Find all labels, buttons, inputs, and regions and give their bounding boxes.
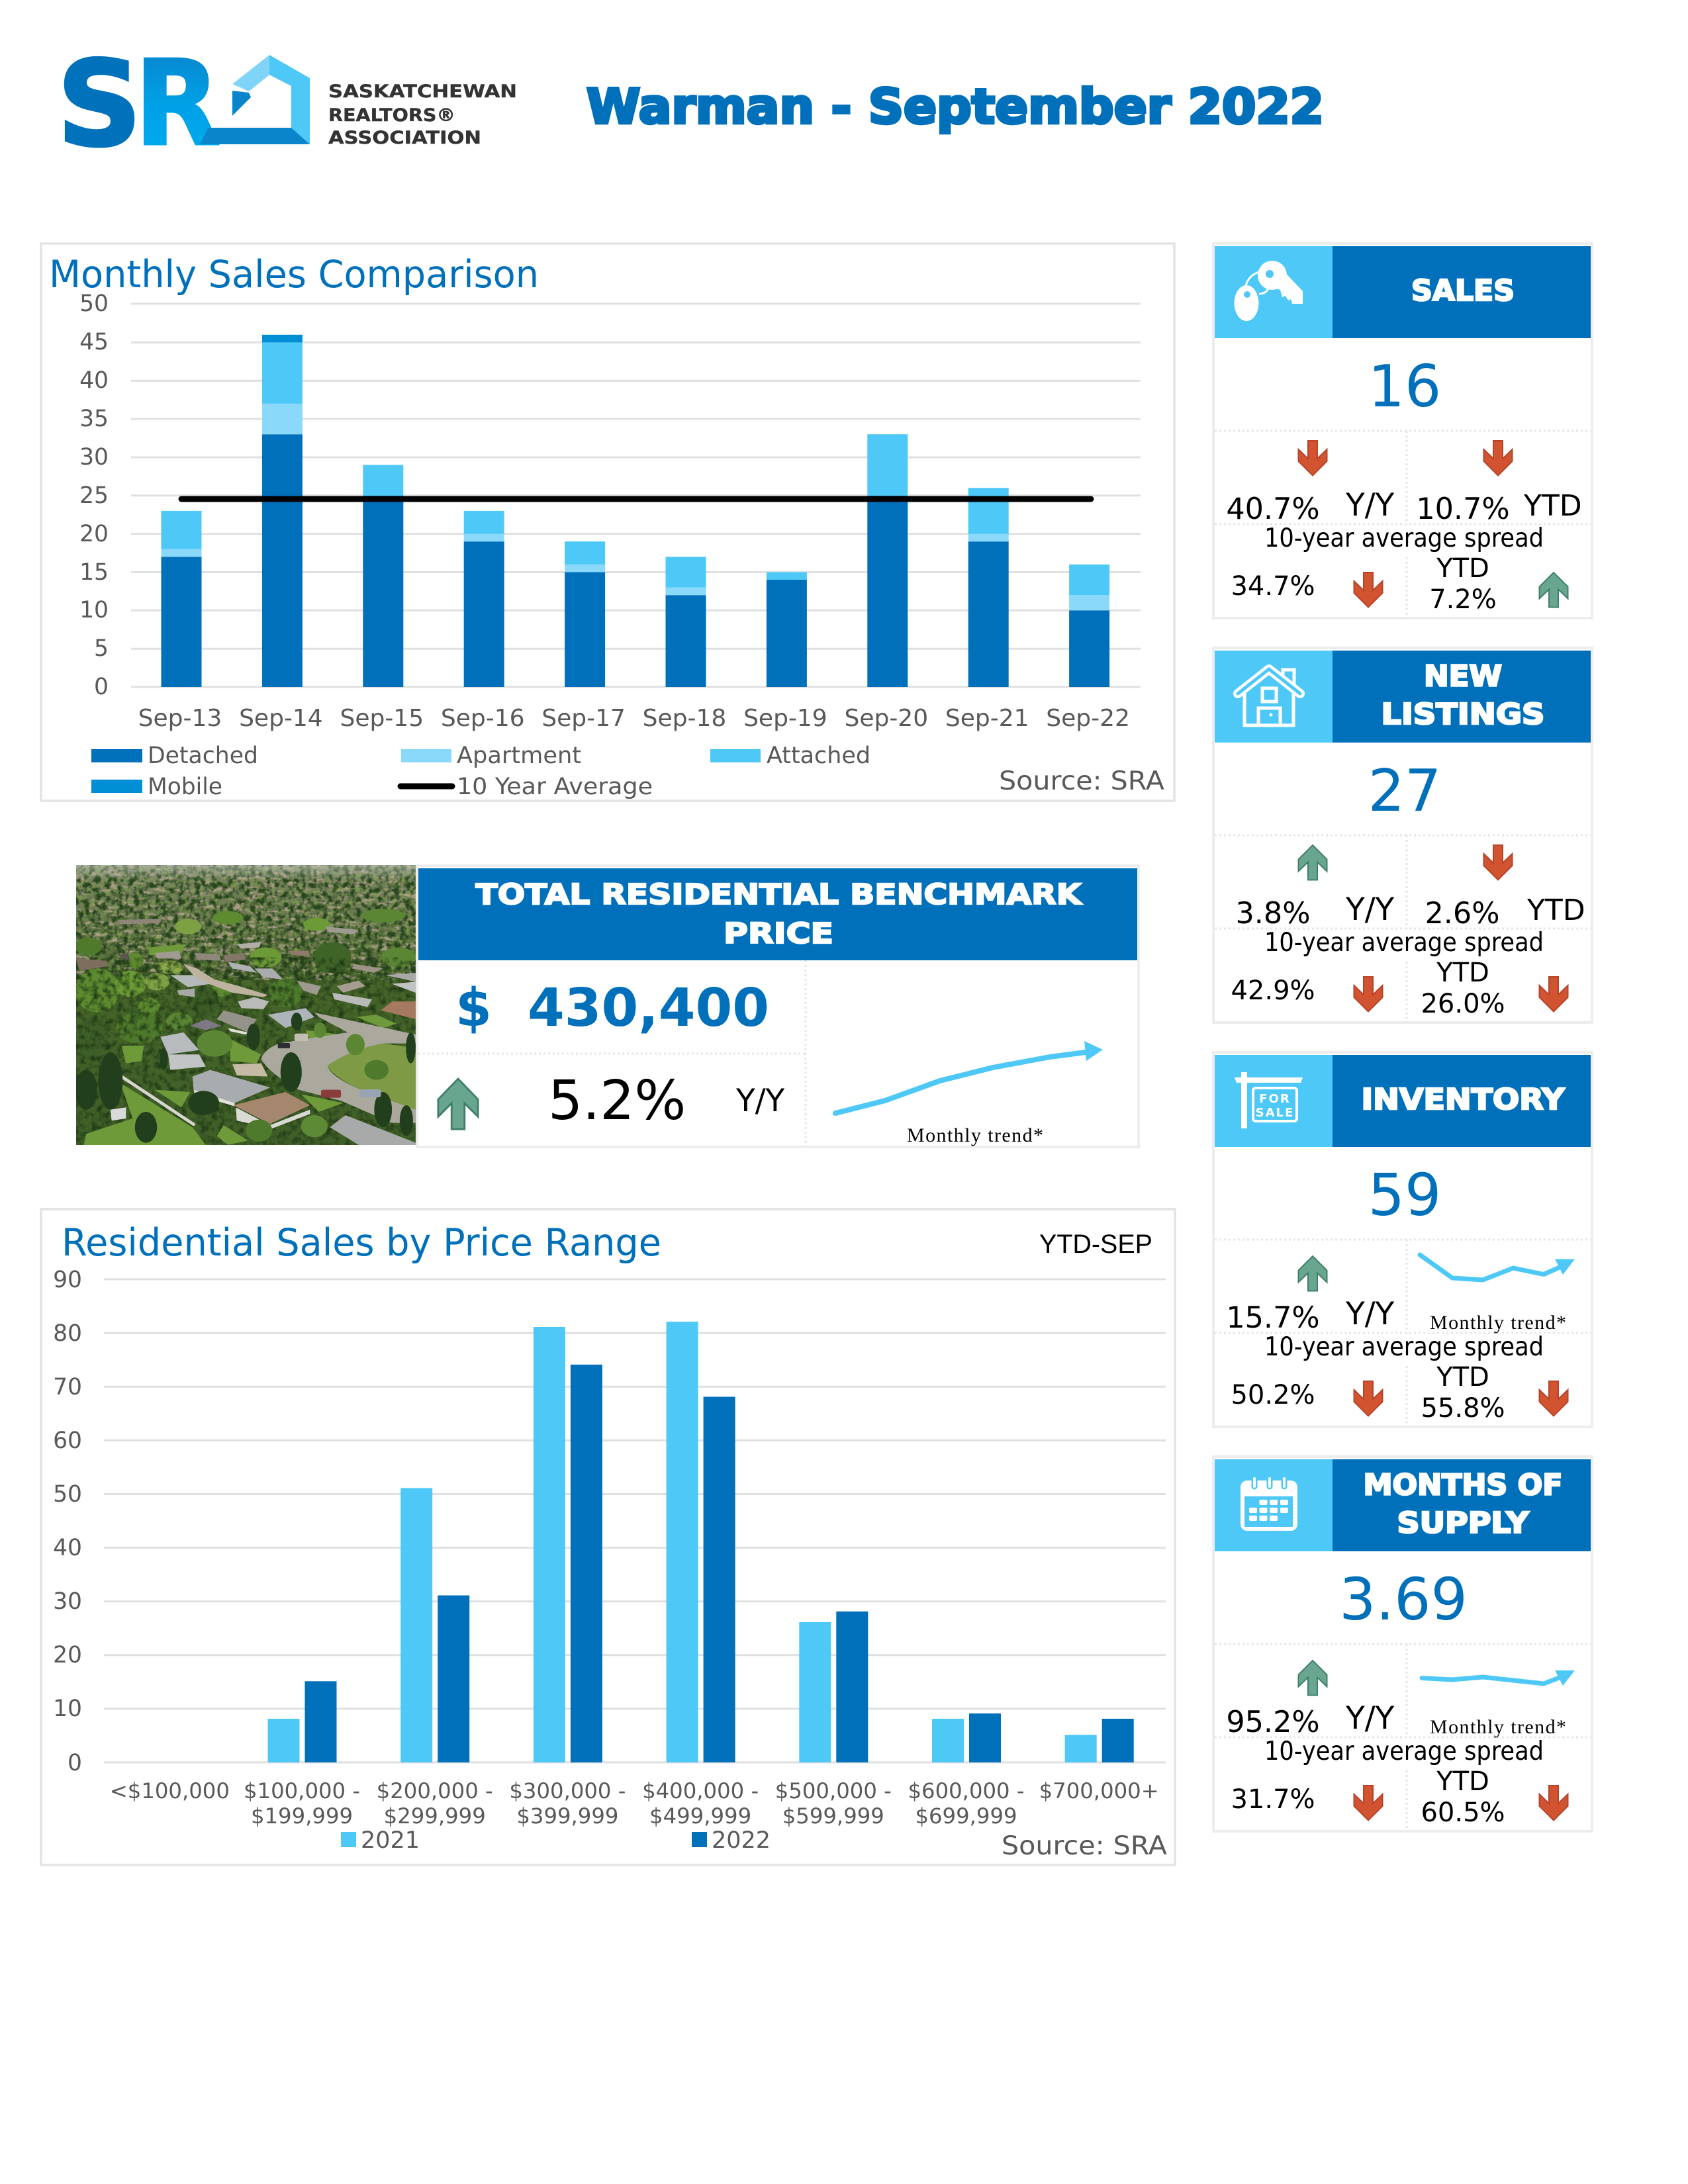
card header: NEW — [1424, 659, 1502, 694]
monthly trend arrow — [1422, 1670, 1575, 1686]
x axis labels: Sep-13 — [138, 705, 222, 732]
x axis labels: $599,999 — [782, 1803, 884, 1829]
year to date spread: YTD — [1436, 958, 1489, 988]
year to date spread: YTD — [1436, 1766, 1489, 1797]
arrow: year over year — [1299, 845, 1327, 880]
gridlines and y axis: 40 — [53, 1535, 82, 1561]
year over year change: Y/Y — [735, 1083, 785, 1119]
logo — [57, 35, 517, 173]
year over year change — [1226, 1700, 1395, 1739]
x axis labels: $700,000+ — [1039, 1778, 1159, 1803]
panel: residential sales by price range — [41, 1209, 1175, 1865]
year to date spread — [1429, 553, 1568, 615]
gridlines and y axis: 0 — [94, 674, 109, 700]
year to date spread — [1421, 1362, 1568, 1424]
x axis labels: $500,000 - — [775, 1778, 892, 1803]
gridlines and y axis: 50 — [79, 291, 109, 317]
x axis labels: $499,999 — [649, 1803, 751, 1829]
gridlines and y axis — [79, 291, 1141, 700]
year over year change: Y/Y — [1345, 1700, 1395, 1737]
monthly spread: 34.7% — [1231, 571, 1315, 602]
year to date spread: YTD — [1436, 1362, 1489, 1392]
panel header — [418, 868, 1137, 960]
main value: 3.69 — [1339, 1566, 1468, 1633]
x axis labels: Sep-22 — [1046, 705, 1130, 732]
monthly trend arrow — [835, 1041, 1103, 1113]
card header: SALES — [1411, 274, 1515, 308]
parked cars — [278, 1034, 381, 1098]
year to date change: 2.6% — [1425, 897, 1500, 931]
year to date change — [1416, 489, 1582, 526]
monthly spread: 31.7% — [1231, 1784, 1315, 1815]
gridlines and y axis: 15 — [79, 559, 109, 586]
gridlines and y axis: 10 — [79, 597, 109, 623]
x axis labels: Sep-16 — [441, 705, 525, 732]
panel header: TOTAL RESIDENTIAL BENCHMARK — [475, 878, 1082, 911]
monthly spread — [1231, 976, 1382, 1011]
year over year change: 40.7% — [1226, 492, 1320, 526]
gridlines and y axis: 5 — [94, 635, 109, 662]
year over year change — [548, 1069, 785, 1132]
x axis labels: $200,000 - — [377, 1778, 493, 1803]
x axis labels: Sep-19 — [743, 705, 827, 732]
monthly trend caption: Monthly trend* — [1430, 1312, 1566, 1334]
stacked bar chart — [162, 335, 1109, 687]
card header: MONTHS OF — [1364, 1468, 1562, 1502]
arrow: year over year — [1299, 1661, 1327, 1696]
gridlines and y axis: 30 — [53, 1588, 82, 1615]
x axis labels: $400,000 - — [642, 1778, 759, 1803]
year to date spread: 55.8% — [1421, 1393, 1505, 1424]
year over year change: 95.2% — [1226, 1706, 1320, 1739]
x axis labels: $699,999 — [915, 1803, 1017, 1829]
monthly spread — [1231, 1380, 1382, 1416]
year over year change — [1226, 487, 1395, 526]
card header: LISTINGS — [1381, 698, 1545, 731]
lawns — [84, 944, 397, 1145]
icon: house — [1238, 669, 1300, 725]
main value: 27 — [1368, 757, 1441, 825]
x axis labels: Sep-15 — [340, 705, 424, 732]
icon: for sale sign: SALE — [1256, 1106, 1294, 1120]
period tag: YTD-SEP — [1039, 1230, 1152, 1259]
logo letter R: R — [134, 35, 220, 172]
houses — [76, 919, 416, 1145]
logo wordmark — [328, 81, 517, 148]
legend: 2021 — [361, 1827, 420, 1854]
gridlines and y axis: 30 — [79, 444, 109, 471]
gridlines and y axis: 80 — [53, 1320, 82, 1347]
logo wordmark: REALTORS® — [328, 105, 455, 126]
panel: monthly sales comparison — [41, 244, 1174, 801]
panel: sales — [1213, 244, 1592, 618]
panel header: PRICE — [724, 917, 833, 950]
arrow: year to date — [1484, 845, 1512, 880]
legend: 10 Year Average — [457, 774, 653, 800]
driveways — [232, 1064, 268, 1077]
logo house mark — [200, 55, 310, 144]
arrow: year over year — [1299, 1256, 1327, 1291]
logo wordmark: SASKATCHEWAN — [328, 81, 517, 102]
legend: Mobile — [148, 774, 222, 800]
gridlines and y axis: 20 — [79, 521, 109, 547]
year to date spread: YTD — [1436, 553, 1489, 584]
gridlines and y axis: 10 — [53, 1696, 82, 1722]
photo: aerial view of neighbourhood — [75, 865, 416, 1145]
gridlines and y axis: 60 — [53, 1428, 82, 1454]
spread caption: 10-year average spread — [1264, 928, 1544, 958]
year to date spread — [1421, 958, 1568, 1019]
gridlines and y axis: 20 — [53, 1642, 82, 1668]
x axis labels: <$100,000 — [110, 1778, 230, 1803]
x axis labels — [110, 1778, 1159, 1829]
x axis labels: Sep-21 — [945, 705, 1029, 732]
x axis labels: $100,000 - — [244, 1778, 360, 1803]
year to date change: YTD — [1526, 893, 1585, 927]
panel: total residential benchmark price — [417, 866, 1139, 1147]
x axis labels: $299,999 — [384, 1803, 486, 1829]
card header — [1215, 1055, 1591, 1147]
year to date spread: 7.2% — [1429, 584, 1497, 615]
x axis labels: $600,000 - — [908, 1778, 1025, 1803]
logo letter S: S — [57, 36, 142, 173]
card header — [1215, 1459, 1591, 1551]
yard fence — [122, 1077, 195, 1125]
icon: for sale sign — [1235, 1072, 1303, 1128]
panel: new listings — [1213, 648, 1592, 1023]
main value: 59 — [1368, 1161, 1441, 1229]
icon: for sale sign: FOR — [1259, 1092, 1291, 1106]
legend: Apartment — [457, 743, 581, 769]
arrow: year to date — [1484, 441, 1512, 475]
monthly trend caption: Monthly trend* — [1430, 1716, 1566, 1738]
year to date spread — [1421, 1766, 1568, 1828]
spread caption: 10-year average spread — [1264, 1332, 1544, 1362]
year over year change — [1226, 1296, 1395, 1335]
gridlines and y axis: 0 — [68, 1750, 82, 1776]
cul-de-sac lawn — [328, 1044, 416, 1110]
icon: up arrow — [438, 1079, 478, 1129]
card header — [1215, 651, 1591, 743]
icon: keys — [1234, 261, 1303, 321]
year to date change — [1425, 893, 1585, 931]
gridlines and y axis: 35 — [79, 406, 109, 432]
x axis labels: $300,000 - — [509, 1778, 626, 1803]
year to date change: 10.7% — [1416, 492, 1510, 526]
gridlines and y axis: 25 — [79, 482, 109, 509]
x axis labels: Sep-20 — [844, 705, 928, 732]
gridlines and y axis: 45 — [79, 329, 109, 355]
title: Warman - September 2022 — [586, 79, 1324, 134]
main value: 16 — [1368, 353, 1441, 420]
gridlines and y axis: 40 — [79, 367, 109, 394]
year over year change: Y/Y — [1345, 1296, 1395, 1332]
year to date change: YTD — [1523, 489, 1582, 523]
gridlines and y axis: 90 — [53, 1267, 82, 1293]
year over year change — [1235, 891, 1395, 931]
large trees — [75, 909, 416, 1057]
arrow: year over year — [1299, 441, 1327, 475]
chart title: monthly sales: Monthly Sales Comparison — [49, 253, 539, 296]
gridlines and y axis: 70 — [53, 1374, 82, 1400]
x axis labels: $199,999 — [251, 1803, 353, 1829]
x axis labels: Sep-14 — [239, 705, 323, 732]
x axis labels: Sep-17 — [541, 705, 626, 732]
legend: Detached — [148, 743, 258, 769]
monthly trend caption: Monthly trend* — [907, 1124, 1043, 1146]
year over year change: 5.2% — [548, 1069, 686, 1132]
year to date spread: 26.0% — [1421, 989, 1505, 1019]
monthly spread — [1231, 571, 1382, 608]
source note: Source: SRA — [1002, 1831, 1167, 1861]
card header: INVENTORY — [1361, 1083, 1566, 1116]
year over year change: 3.8% — [1235, 897, 1311, 931]
year to date spread: 60.5% — [1421, 1797, 1505, 1828]
benchmark price value: $ — [455, 978, 492, 1038]
card header — [1215, 246, 1591, 338]
x axis labels: Sep-18 — [643, 705, 726, 732]
x axis labels — [138, 705, 1130, 732]
year over year change: Y/Y — [1345, 487, 1395, 523]
road and cul-de-sac — [261, 1013, 416, 1123]
logo wordmark: ASSOCIATION — [328, 128, 481, 148]
legend: Attached — [767, 743, 870, 769]
icon: calendar — [1241, 1479, 1297, 1531]
panel: inventory — [1213, 1052, 1592, 1427]
conifers and foreground trees — [75, 1013, 416, 1143]
gridlines and y axis: 50 — [53, 1481, 82, 1508]
monthly spread: 42.9% — [1231, 976, 1315, 1006]
source note: Source: SRA — [999, 766, 1164, 796]
gridlines and y axis — [53, 1267, 1166, 1776]
card header: SUPPLY — [1397, 1506, 1530, 1540]
year over year change: 15.7% — [1226, 1301, 1320, 1335]
benchmark price value: 430,400 — [528, 978, 769, 1038]
legend — [341, 1827, 771, 1854]
year over year change: Y/Y — [1345, 891, 1395, 928]
spread caption: 10-year average spread — [1264, 523, 1544, 553]
clustered bar chart — [267, 1322, 1134, 1762]
10 year average line — [181, 496, 1091, 502]
monthly spread — [1231, 1784, 1382, 1820]
spread caption: 10-year average spread — [1264, 1737, 1544, 1766]
legend — [91, 743, 870, 800]
monthly trend arrow — [1420, 1255, 1575, 1280]
x axis labels: $399,999 — [516, 1803, 618, 1829]
monthly spread: 50.2% — [1231, 1380, 1315, 1410]
chart title: sales by price range: Residential Sales by Price Range — [62, 1221, 661, 1265]
panel: months of supply — [1213, 1457, 1592, 1831]
legend: 2022 — [712, 1827, 771, 1854]
